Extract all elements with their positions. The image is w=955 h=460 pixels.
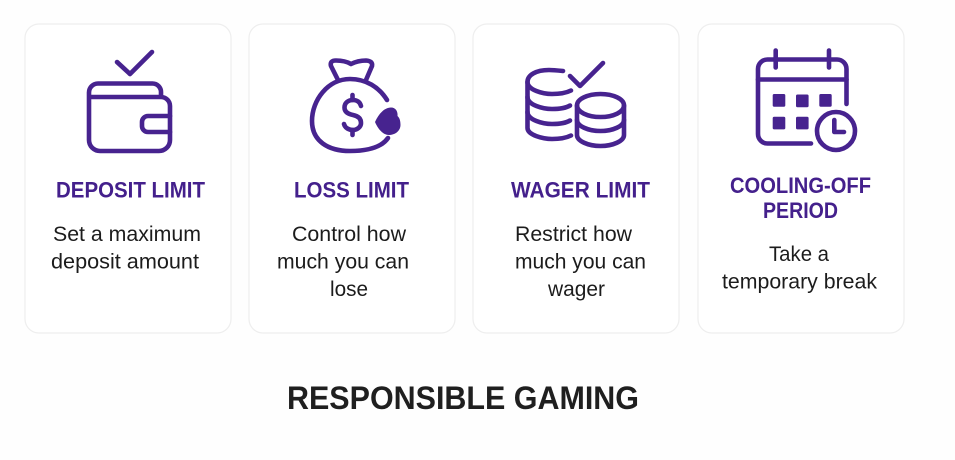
icon: calendar with clock [758, 50, 855, 150]
text: wager limit description: Restrict how [515, 223, 633, 246]
text: loss limit description: much you can [277, 250, 409, 274]
heading: wager limit: WAGER LIMIT [511, 178, 651, 202]
icon: money bag with heart [312, 60, 400, 151]
text: loss limit description [277, 223, 409, 301]
text: deposit limit description [51, 223, 201, 274]
text: cooling-off description [722, 243, 877, 294]
heading: cooling-off period: PERIOD [763, 198, 838, 223]
text: wager limit description [515, 223, 646, 301]
panel: wager limit [473, 24, 679, 333]
panel: cooling-off period [698, 24, 904, 333]
heading: cooling-off period [730, 173, 871, 223]
text: wager limit description: much you can [515, 250, 646, 274]
text: deposit limit description: deposit amount [51, 250, 199, 274]
heading: deposit limit: DEPOSIT LIMIT [56, 178, 206, 202]
text: loss limit description: lose [330, 278, 368, 301]
heading: loss limit: LOSS LIMIT [294, 178, 410, 202]
icon: coin stacks with check mark [528, 63, 624, 146]
text: loss limit description: Control how [292, 223, 407, 246]
text: deposit limit description: Set a maximum [53, 223, 201, 246]
text: wager limit description: wager [547, 278, 605, 301]
panel: loss limit [249, 24, 455, 333]
text: cooling-off description: Take a [769, 243, 829, 266]
title: RESPONSIBLE GAMING [287, 380, 639, 416]
icon: wallet with check mark [89, 52, 170, 151]
heading: cooling-off period: COOLING-OFF [730, 173, 871, 198]
panel: deposit limit [25, 24, 231, 333]
text: cooling-off description: temporary break [722, 270, 877, 294]
